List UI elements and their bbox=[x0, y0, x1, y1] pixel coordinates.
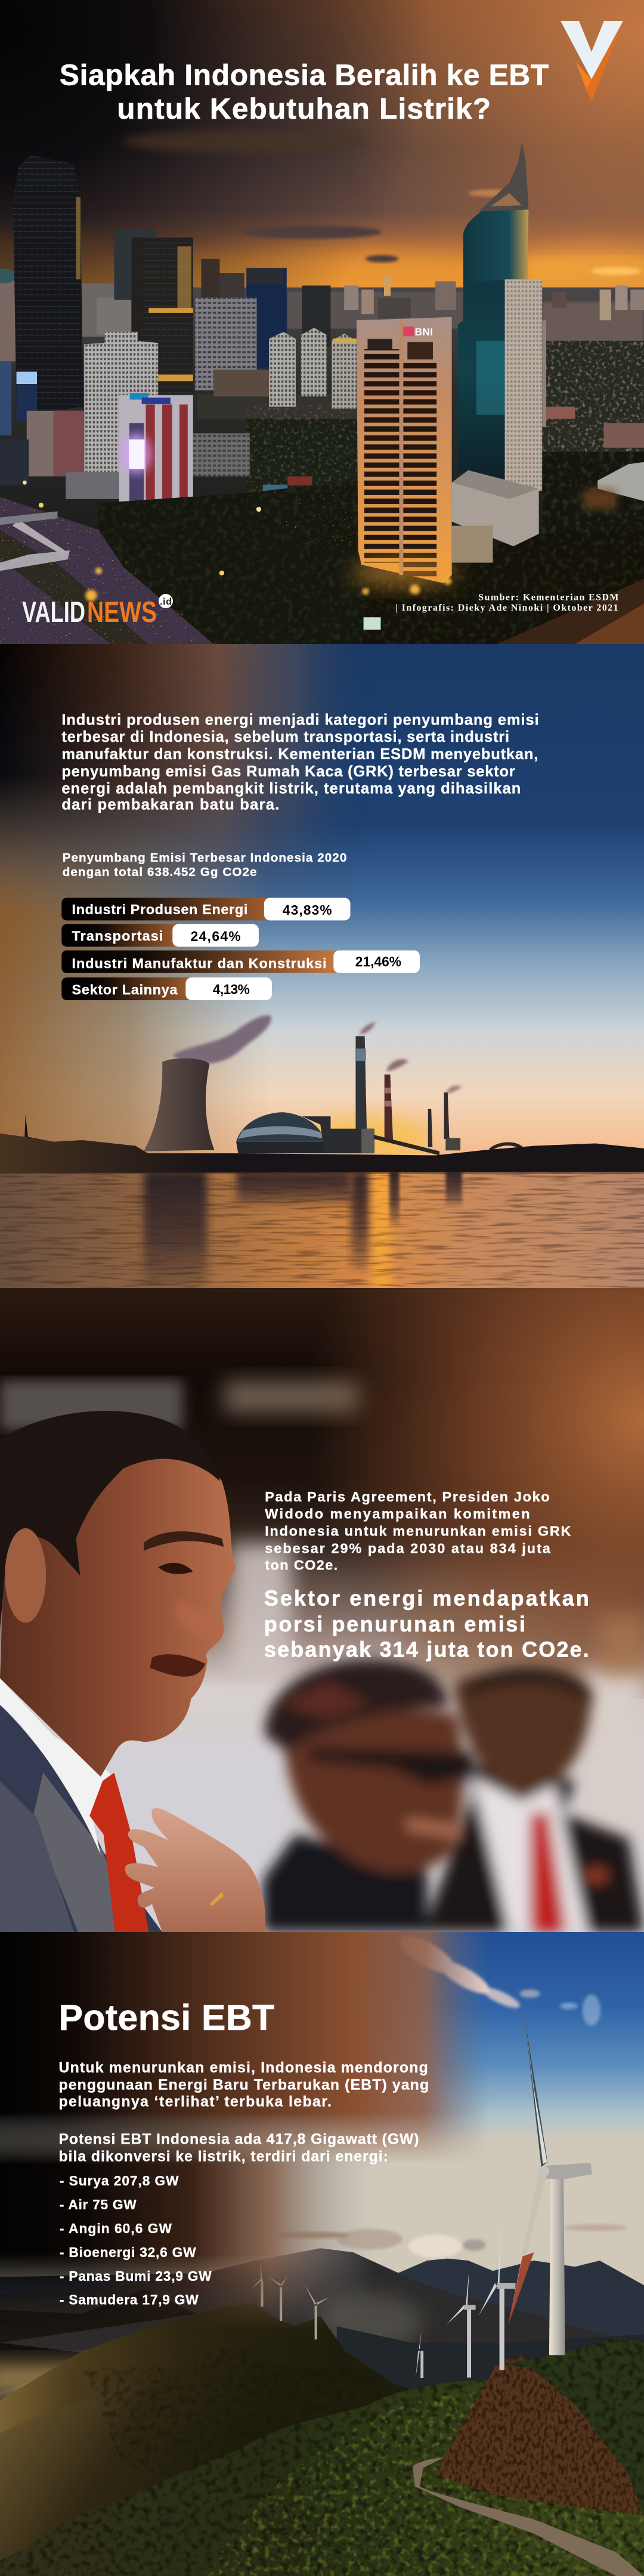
energy source list: - Air 75 GW bbox=[60, 2197, 137, 2212]
dark skyscrapers left bbox=[13, 155, 287, 421]
main figure bbox=[0, 1411, 265, 1932]
icon: mid wind turbines bbox=[416, 2224, 515, 2378]
commitment text: Widodo menyampaikan komitmen bbox=[265, 1506, 530, 1521]
title: Siapkah Indonesia Beralih ke EBT bbox=[60, 58, 549, 92]
blurred men bbox=[263, 1659, 644, 1932]
source credit bbox=[395, 592, 618, 613]
bar: Sektor Lainnya: 4,13% bbox=[213, 982, 250, 997]
intro text: penggunaan Energi Baru Terbarukan (EBT) yang bbox=[58, 2077, 429, 2093]
emphasis statement: porsi penurunan emisi bbox=[264, 1612, 525, 1636]
bar: Sektor Lainnya bbox=[61, 977, 272, 1000]
Wisma 46 tower bbox=[23, 142, 546, 601]
bar chart heading: dengan total 638.452 Gg CO2e bbox=[63, 865, 256, 879]
panel: renewable energy potential bbox=[0, 1929, 644, 2576]
bar: Industri Manufaktur dan Konstruksi bbox=[61, 950, 420, 973]
BNI tower: BNI bbox=[415, 326, 433, 338]
BNI tower bbox=[351, 317, 458, 587]
sky and clouds bbox=[0, 1929, 644, 2302]
panel: emissions and power plant bbox=[0, 644, 644, 1288]
energy source list: - Panas Bumi 23,9 GW bbox=[60, 2268, 212, 2284]
mountains and hills bbox=[0, 2248, 644, 2576]
chart title text: dari pembakaran batu bara. bbox=[61, 797, 279, 813]
bar: Transportasi bbox=[61, 924, 259, 947]
title: untuk Kebutuhan Listrik? bbox=[117, 92, 491, 125]
bar: Industri Produsen Energi bbox=[61, 898, 351, 921]
logo: V mark bbox=[561, 21, 623, 101]
energy source list: - Bioenergi 32,6 GW bbox=[60, 2244, 196, 2260]
chart title text: terbesar di Indonesia, sebelum transportasi, serta industri bbox=[61, 729, 509, 745]
heading: Potensi EBT bbox=[58, 1997, 274, 2038]
logo: Validnews.id bbox=[22, 594, 173, 628]
energy source list: - Samudera 17,9 GW bbox=[60, 2292, 199, 2308]
energy source list bbox=[60, 2173, 212, 2308]
side gradient overlay bbox=[0, 1932, 644, 2576]
intro text: Untuk menurunkan emisi, Indonesia mendorong bbox=[58, 2060, 428, 2076]
bar: Industri Manufaktur dan Konstruksi: 21,46% bbox=[355, 954, 401, 970]
red building with billboard bbox=[119, 393, 193, 502]
logo: Validnews.id: NEWS bbox=[87, 596, 157, 628]
water with reflections bbox=[0, 1171, 644, 1288]
emphasis statement: sebanyak 314 juta ton CO2e. bbox=[264, 1638, 589, 1662]
distant city and ground bbox=[0, 259, 644, 644]
energy source list: - Surya 207,8 GW bbox=[60, 2173, 179, 2188]
icon: large wind turbine bbox=[509, 2010, 592, 2355]
bar chart bbox=[61, 898, 420, 1000]
bar: Industri Produsen Energi: 43,83% bbox=[283, 902, 332, 918]
bar: Industri Produsen Energi: Industri Produsen Energi bbox=[72, 902, 247, 917]
emphasis statement: Sektor energi mendapatkan bbox=[264, 1586, 589, 1610]
chart title text: penyumbang emisi Gas Rumah Kaca (GRK) terbesar sektor bbox=[61, 763, 515, 780]
logo: Validnews.id: VALID bbox=[22, 596, 85, 628]
commitment text: ton CO2e. bbox=[265, 1558, 338, 1573]
title bbox=[60, 63, 549, 119]
bar: Sektor Lainnya: Sektor Lainnya bbox=[72, 982, 178, 998]
panel: city skyline cover bbox=[0, 0, 644, 644]
intro text: peluangnya ‘terlihat’ terbuka lebar. bbox=[58, 2094, 332, 2110]
commitment text: sebesar 29% pada 2030 atau 834 juta bbox=[265, 1540, 551, 1556]
bar: Transportasi: Transportasi bbox=[72, 928, 163, 943]
road and foreground trees bbox=[0, 481, 644, 644]
chart title text bbox=[61, 712, 539, 813]
chart title text: manufaktur dan konstruksi. Kementerian ESDM menyebutkan, bbox=[61, 746, 538, 763]
bar: Transportasi: 24,64% bbox=[191, 928, 241, 944]
source credit: | Infografis: Dieky Ade Ninoki | Oktober 2021 bbox=[395, 603, 618, 613]
panel: Paris Agreement commitment bbox=[0, 1288, 644, 1932]
intro text: Potensi EBT Indonesia ada 417,8 Gigawatt (GW) bbox=[58, 2131, 419, 2147]
bar chart heading bbox=[63, 851, 346, 879]
icon: distant wind turbines bbox=[252, 2261, 329, 2339]
bar chart heading: Penyumbang Emisi Terbesar Indonesia 2020 bbox=[63, 851, 346, 865]
sky and side gradient bbox=[0, 644, 644, 1156]
commitment text: Indonesia untuk menurunkan emisi GRK bbox=[265, 1523, 571, 1538]
blurred background bbox=[0, 1288, 644, 1932]
icon: power plant silhouette bbox=[0, 1015, 644, 1173]
intro text bbox=[58, 2060, 429, 2165]
sky background bbox=[0, 0, 644, 287]
bar: Industri Manufaktur dan Konstruksi: Industri Manufaktur dan Konstruksi bbox=[72, 955, 327, 971]
logo: Validnews.id: .id bbox=[160, 597, 172, 607]
energy source list: - Angin 60,6 GW bbox=[60, 2221, 172, 2236]
chart title text: Industri produsen energi menjadi kategori penyumbang emisi bbox=[61, 712, 539, 729]
emphasis statement bbox=[264, 1586, 589, 1662]
source credit: Sumber: Kementerian ESDM bbox=[478, 592, 618, 602]
commitment text: Pada Paris Agreement, Presiden Joko bbox=[265, 1489, 550, 1504]
commitment text bbox=[265, 1489, 571, 1573]
mid-rise hotels bbox=[0, 298, 357, 499]
chart title text: energi adalah pembangkit listrik, terutama yang dihasilkan bbox=[61, 781, 521, 797]
intro text: bila dikonversi ke listrik, terdiri dari energi: bbox=[58, 2148, 388, 2165]
